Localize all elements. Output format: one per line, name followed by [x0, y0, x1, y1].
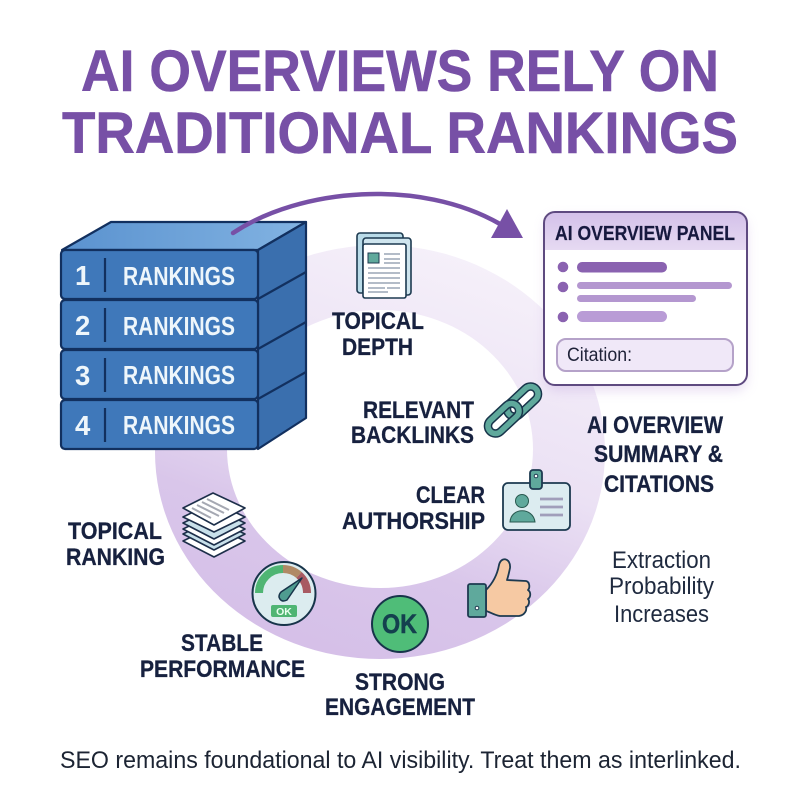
- label: topical ranking: [66, 518, 165, 571]
- label: relevant backlinks: [351, 397, 474, 449]
- label: clear authorship: CLEAR: [416, 482, 485, 509]
- icon: chain link: [485, 383, 541, 437]
- tier 3: [61, 350, 258, 399]
- label: topical depth: TOPICAL: [332, 308, 424, 335]
- title: TRADITIONAL RANKINGS: [62, 101, 738, 166]
- label: topical ranking: RANKING: [66, 544, 165, 571]
- label: extraction probability: Extraction: [612, 547, 711, 574]
- tier 4: RANKINGS: [123, 410, 235, 440]
- tier 1: 1: [75, 260, 90, 291]
- arrow: rankings to panel: [233, 194, 523, 238]
- title: [62, 39, 738, 166]
- label: AI overview summary and citations: AI OVERVIEW: [587, 412, 724, 439]
- icon: stacked pages: [183, 493, 245, 557]
- label: topical ranking: TOPICAL: [68, 518, 162, 545]
- label: AI overview summary and citations: SUMMARY &: [594, 441, 723, 468]
- tier 2: RANKINGS: [123, 311, 235, 341]
- tier 1: [61, 250, 258, 299]
- label: relevant backlinks: RELEVANT: [363, 397, 474, 424]
- tier 2: [61, 300, 258, 349]
- label: relevant backlinks: BACKLINKS: [351, 422, 474, 449]
- tier 3: RANKINGS: [123, 360, 235, 390]
- footer text: SEO remains foundational to AI visibility. Treat them as interlinked.: [60, 747, 741, 774]
- ranking stack: [61, 222, 306, 449]
- stack side face: [258, 222, 306, 449]
- icon: gauge: OK: [276, 606, 292, 618]
- label: clear authorship: AUTHORSHIP: [342, 508, 485, 535]
- label: strong engagement: [325, 669, 475, 721]
- tier 4: 4: [75, 410, 91, 441]
- label: topical depth: [332, 308, 424, 361]
- label: topical depth: DEPTH: [342, 334, 413, 361]
- tier 1: RANKINGS: [123, 261, 235, 291]
- label: stable performance: PERFORMANCE: [140, 656, 305, 683]
- label: stable performance: STABLE: [181, 630, 263, 657]
- tier 3: 3: [75, 360, 90, 391]
- icon: OK badge: [372, 596, 428, 652]
- panel heading: AI OVERVIEW PANEL: [555, 222, 735, 245]
- icon: thumbs up: [468, 559, 530, 617]
- panel list: [558, 262, 732, 322]
- icon: gauge: [252, 562, 316, 625]
- label: extraction probability: Increases: [614, 601, 709, 628]
- panel: AI overview: [544, 212, 747, 390]
- tier 4: [61, 400, 258, 449]
- label: stable performance: [140, 630, 305, 683]
- stack top face: [62, 222, 306, 250]
- label: AI overview summary and citations: [587, 412, 724, 498]
- title: AI OVERVIEWS RELY ON: [81, 39, 719, 104]
- icon: document: [357, 233, 411, 298]
- icon: ID badge: [503, 470, 570, 530]
- label: clear authorship: [342, 482, 485, 535]
- label: AI overview summary and citations: CITATIONS: [604, 471, 714, 498]
- label: extraction probability: [609, 547, 714, 628]
- citation box: [557, 339, 733, 371]
- icon: OK badge: OK: [382, 609, 417, 639]
- citation box: Citation:: [567, 345, 632, 366]
- label: strong engagement: STRONG: [355, 669, 445, 696]
- tier 2: 2: [75, 310, 90, 341]
- label: extraction probability: Probability: [609, 573, 714, 600]
- purple ring: [155, 245, 605, 659]
- label: strong engagement: ENGAGEMENT: [325, 694, 475, 721]
